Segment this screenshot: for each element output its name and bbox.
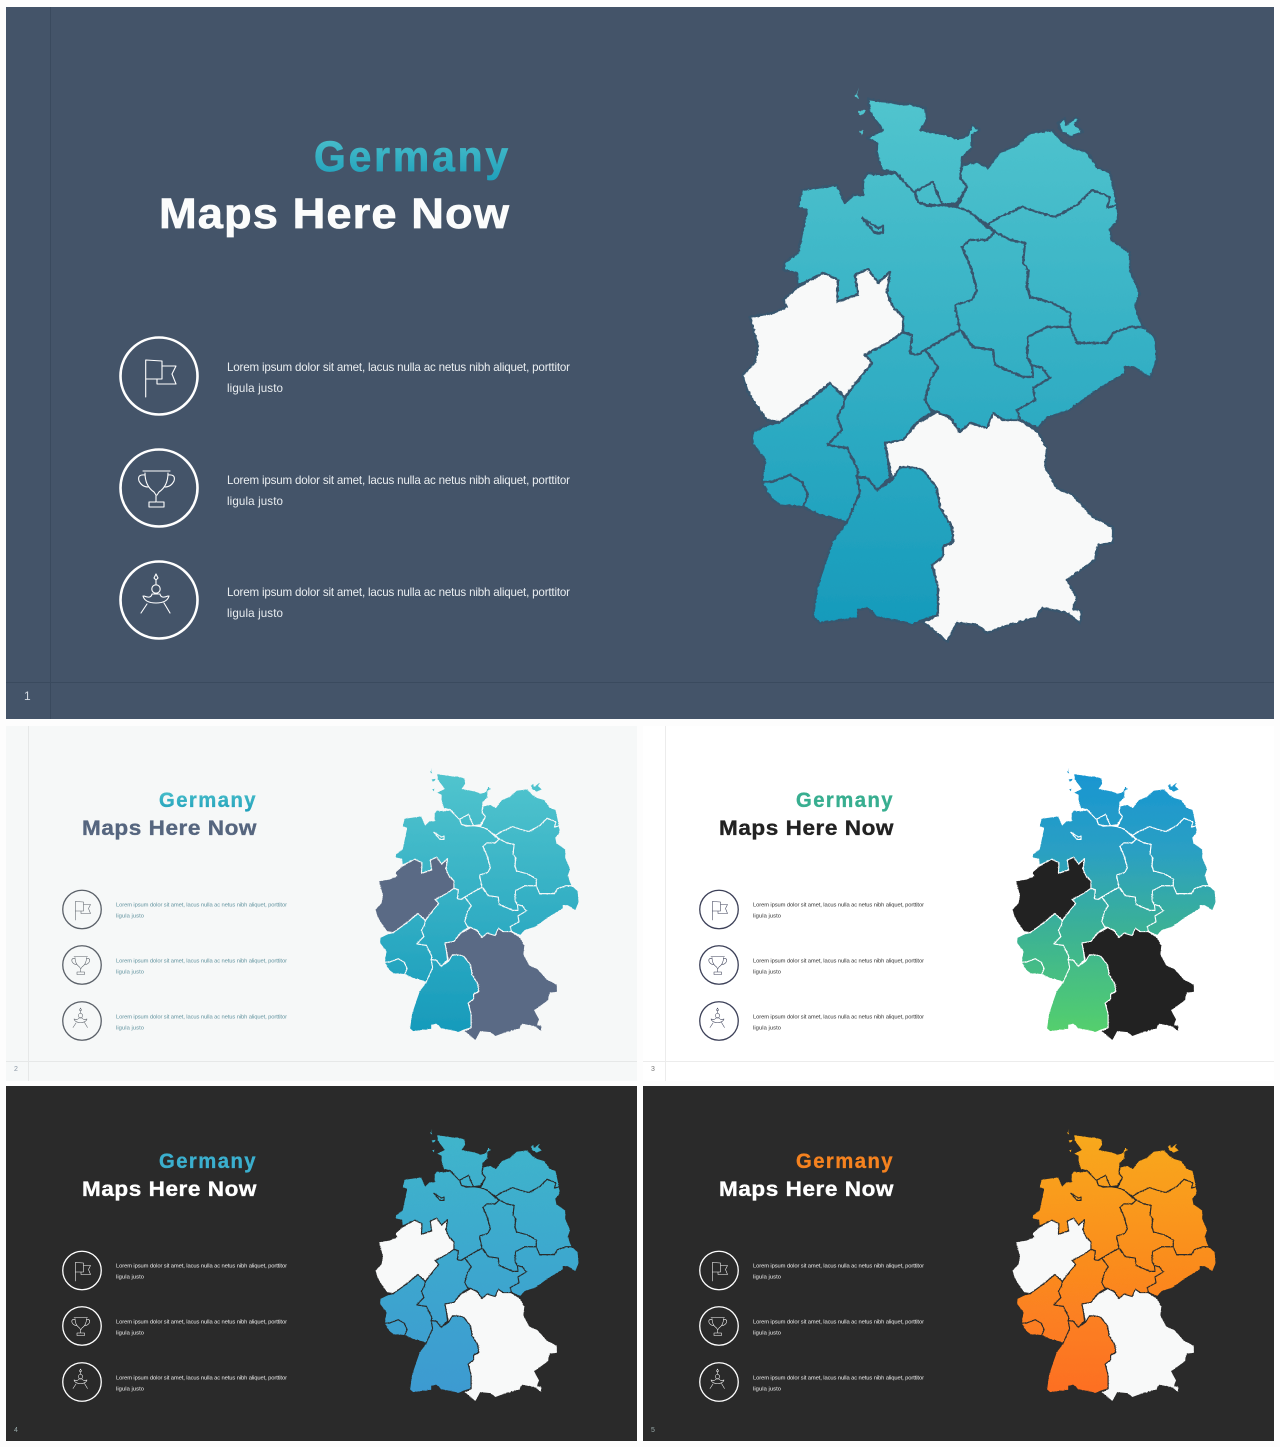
icon: flag <box>700 890 738 929</box>
text blocks: Lorem ipsum dolor sit amet, lacus nulla ac netus nibh aliquet, porttitor <box>753 958 924 964</box>
title: Germany: Germany <box>796 789 894 812</box>
text blocks <box>116 1264 287 1392</box>
teal federal states <box>752 88 1157 625</box>
icon: flag in circle <box>120 338 198 414</box>
text blocks: ligula justo <box>116 970 144 976</box>
text blocks: ligula justo <box>753 1330 781 1336</box>
text blocks: ligula justo <box>116 1386 144 1392</box>
text blocks: ligula justo <box>753 914 781 920</box>
map of Germany: blue and white <box>375 1129 579 1402</box>
icon: trophy in circle <box>120 450 198 526</box>
title: Germany: Germany <box>314 133 511 181</box>
title: Maps Here Now: Maps Here Now <box>159 190 510 238</box>
text blocks: Lorem ipsum dolor sit amet, lacus nulla ac netus nibh aliquet, porttitor <box>753 1014 924 1020</box>
icon: trophy <box>700 946 738 984</box>
slide number 5: 5 <box>651 1427 655 1434</box>
title: Maps Here Now: Maps Here Now <box>82 1178 257 1201</box>
icon: compass <box>700 1002 738 1040</box>
text blocks: Lorem ipsum dolor sit amet, lacus nulla ac netus nibh aliquet, porttitor <box>116 1320 287 1326</box>
slide number 2: 2 <box>14 1066 18 1073</box>
text blocks: ligula justo <box>116 914 144 920</box>
text blocks: ligula justo <box>753 1386 781 1392</box>
text blocks: Lorem ipsum dolor sit amet, lacus nulla ac netus nibh aliquet, porttitor <box>116 958 287 964</box>
text blocks: Lorem ipsum dolor sit amet, lacus nulla ac netus nibh aliquet, porttitor <box>753 1320 924 1326</box>
slide 4: black slide with blue map <box>6 1086 637 1441</box>
text blocks <box>753 902 924 1032</box>
slide 2: light slide <box>6 726 637 1081</box>
icon: compass <box>63 1002 101 1040</box>
icon: flag <box>700 1251 738 1290</box>
map of Germany: orange and white <box>1012 1129 1216 1402</box>
map of Germany: blue-green and black <box>1012 768 1216 1041</box>
text blocks: Lorem ipsum dolor sit amet, lacus nulla ac netus nibh aliquet, porttitor <box>753 1376 924 1382</box>
highlighted states: North Rhine-Westphalia and Bavaria <box>743 269 1113 642</box>
text blocks: Lorem ipsum dolor sit amet, lacus nulla ac netus nibh aliquet, porttitor <box>116 902 287 908</box>
icon: compass in circle <box>120 562 198 638</box>
text blocks: ligula justo <box>753 1274 781 1280</box>
text blocks: Lorem ipsum dolor sit amet, lacus nulla ac netus nibh aliquet, porttitor <box>753 902 924 908</box>
text blocks: Lorem ipsum dolor sit amet, lacus nulla ac netus nibh aliquet, porttitor <box>116 1014 287 1020</box>
text blocks: ligula justo <box>116 1330 144 1336</box>
icon: compass <box>63 1363 101 1401</box>
text block 1: Lorem ipsum dolor sit amet, lacus nulla ac netus nibh aliquet, porttitor <box>227 361 570 374</box>
text blocks: ligula justo <box>116 1026 144 1032</box>
title: Maps Here Now: Maps Here Now <box>82 817 257 840</box>
text blocks <box>753 1264 924 1392</box>
text block 3: Lorem ipsum dolor sit amet, lacus nulla ac netus nibh aliquet, porttitor <box>227 586 570 599</box>
slide 3: white slide <box>643 726 1274 1081</box>
icon: compass <box>700 1363 738 1401</box>
icon: trophy <box>63 1307 101 1345</box>
slide number 1: 1 <box>24 689 31 703</box>
slide number 4: 4 <box>14 1427 18 1434</box>
text block 2 <box>227 474 570 508</box>
text block 3 <box>227 586 570 620</box>
text blocks: ligula justo <box>116 1274 144 1280</box>
text block 1: ligula justo <box>227 382 283 395</box>
icon: flag <box>63 890 101 929</box>
title: Germany: Germany <box>159 789 257 812</box>
text blocks: ligula justo <box>753 970 781 976</box>
slide 1: main dark blue slide <box>6 7 1274 719</box>
text blocks: Lorem ipsum dolor sit amet, lacus nulla ac netus nibh aliquet, porttitor <box>116 1376 287 1382</box>
text blocks: Lorem ipsum dolor sit amet, lacus nulla ac netus nibh aliquet, porttitor <box>753 1264 924 1270</box>
text block 2: ligula justo <box>227 495 283 508</box>
icon: trophy <box>700 1307 738 1345</box>
title: Germany: Germany <box>159 1150 257 1173</box>
icon: flag <box>63 1251 101 1290</box>
slide number 3: 3 <box>651 1066 655 1073</box>
text blocks: Lorem ipsum dolor sit amet, lacus nulla ac netus nibh aliquet, porttitor <box>116 1264 287 1270</box>
text blocks <box>116 902 287 1032</box>
title: Germany: Germany <box>796 1150 894 1173</box>
map of Germany: main <box>743 88 1157 642</box>
text block 2: Lorem ipsum dolor sit amet, lacus nulla ac netus nibh aliquet, porttitor <box>227 474 570 487</box>
icon: trophy <box>63 946 101 984</box>
text block 3: ligula justo <box>227 607 283 620</box>
title: Maps Here Now: Maps Here Now <box>719 1178 894 1201</box>
map of Germany: teal and slate <box>375 768 579 1041</box>
slide 5: black slide with orange map <box>643 1086 1274 1441</box>
text block 1 <box>227 361 570 395</box>
text blocks: ligula justo <box>753 1026 781 1032</box>
title: Maps Here Now: Maps Here Now <box>719 817 894 840</box>
